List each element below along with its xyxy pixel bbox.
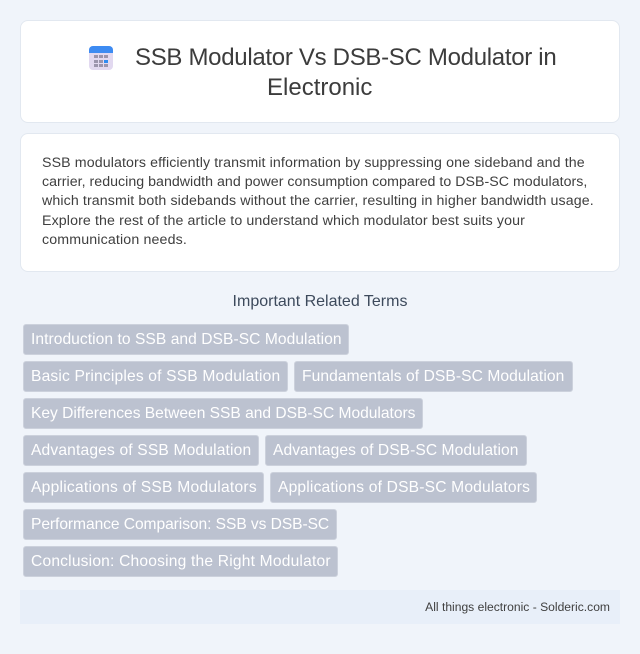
tag: [270, 472, 537, 503]
tag: Key Differences Between SSB and DSB-SC Modulators: [31, 405, 415, 422]
tag: [23, 398, 423, 429]
tag: Basic Principles of SSB Modulation: [31, 368, 280, 385]
tag: Conclusion: Choosing the Right Modulator: [31, 553, 331, 570]
summary text: SSB modulators efficiently transmit information by suppressing one sideband and the: [42, 155, 585, 171]
tag: Applications of DSB-SC Modulators: [278, 479, 530, 496]
tag: [23, 509, 337, 540]
summary text: which transmit both sidebands without the carrier, resulting in higher bandwidth usage.: [42, 193, 594, 209]
icon: calendar: [89, 46, 113, 70]
summary text: communication needs.: [42, 232, 187, 248]
panel: tags: [23, 324, 573, 577]
tag: Advantages of DSB-SC Modulation: [273, 442, 518, 459]
tag: [23, 472, 264, 503]
title: Electronic: [267, 74, 372, 101]
tag: Performance Comparison: SSB vs DSB-SC: [31, 516, 329, 533]
tag: [265, 435, 527, 466]
panel: title card: [20, 20, 620, 123]
tag: [23, 435, 259, 466]
summary text: [42, 155, 594, 248]
tag: Advantages of SSB Modulation: [31, 442, 251, 459]
footer bar: [20, 590, 620, 624]
tag: [23, 546, 338, 577]
tag: Applications of SSB Modulators: [31, 479, 257, 496]
summary text: Explore the rest of the article to understand which modulator best suits your: [42, 213, 525, 229]
tag: [23, 324, 349, 355]
heading: important related terms: Important Related Terms: [233, 293, 407, 310]
tag: [294, 361, 573, 392]
footer text: All things electronic - Solderic.com: [425, 600, 610, 614]
tag: Introduction to SSB and DSB-SC Modulation: [31, 331, 342, 348]
title: [135, 44, 556, 101]
summary text: carrier, reducing bandwidth and power consumption compared to DSB-SC modulators,: [42, 174, 587, 190]
tag: [23, 361, 288, 392]
panel: summary card: [20, 133, 620, 272]
title: SSB Modulator Vs DSB-SC Modulator in: [135, 44, 556, 71]
tag: Fundamentals of DSB-SC Modulation: [302, 368, 564, 385]
